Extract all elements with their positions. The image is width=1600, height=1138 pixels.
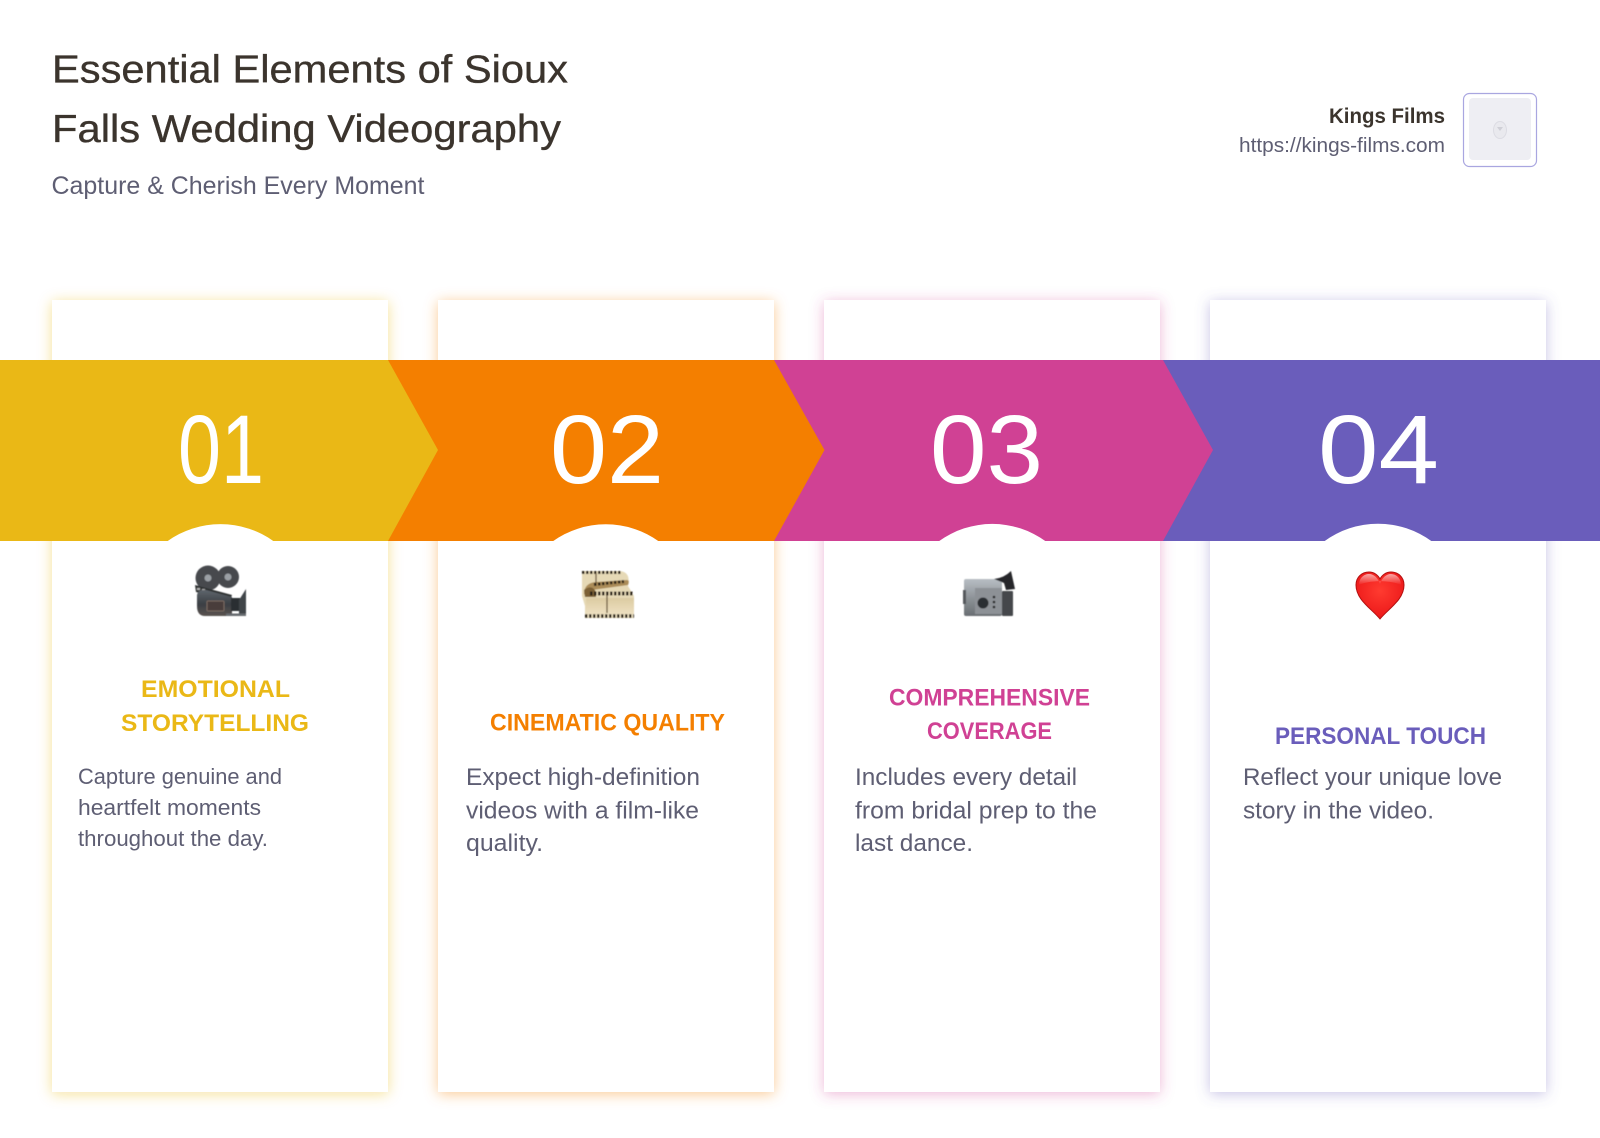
notch: card 4 xyxy=(1324,524,1432,542)
panel: card 2 background xyxy=(438,300,774,1092)
card 1 heading: EMOTIONAL xyxy=(141,676,290,703)
card 3 text: last dance. xyxy=(855,830,973,857)
card 4 text: story in the video. xyxy=(1243,798,1434,824)
brand block xyxy=(1239,94,1536,166)
card 3 heading: COMPREHENSIVE xyxy=(889,684,1090,712)
panel: card 3 background xyxy=(824,300,1160,1092)
title xyxy=(52,48,569,151)
card 3 text: from bridal prep to the xyxy=(855,798,1097,824)
chevron band: step 1 xyxy=(0,360,438,541)
card 1 text: throughout the day. xyxy=(78,826,268,851)
header: title and subtitle xyxy=(52,48,569,200)
chevron band: step 3 xyxy=(774,360,1213,541)
icon: video camera xyxy=(963,571,1015,616)
number 04: 04 xyxy=(1318,395,1439,504)
card 4 text: Reflect your unique love xyxy=(1243,764,1502,791)
card 1 text: heartfelt moments xyxy=(78,795,261,820)
card 1 text xyxy=(78,764,282,851)
number 02: 02 xyxy=(550,395,664,504)
notch: card 3 xyxy=(938,524,1046,542)
card 3 text xyxy=(855,764,1097,857)
brand url: https://kings-films.com xyxy=(1239,134,1445,157)
card 3 heading xyxy=(889,684,1090,745)
brand name: Kings Films xyxy=(1329,104,1445,128)
chevron band: step 4 xyxy=(1163,360,1600,541)
card 2 text xyxy=(466,764,700,857)
card 3 text: Includes every detail xyxy=(855,764,1077,791)
card 1 heading xyxy=(121,676,309,737)
notch: card 2 xyxy=(552,524,659,542)
number 03: 03 xyxy=(930,395,1043,504)
card 3 heading: COVERAGE xyxy=(927,718,1052,745)
chevron band: step 2 xyxy=(388,360,824,541)
notch: card 1 xyxy=(167,524,274,542)
card 2 text: Expect high-definition xyxy=(466,764,700,791)
title: Essential Elements of Sioux xyxy=(52,48,569,92)
panel: card 1 background xyxy=(52,300,388,1092)
card 1 text: Capture genuine and xyxy=(78,764,282,789)
card 2 text: quality. xyxy=(466,830,543,857)
title: Falls Wedding Videography xyxy=(52,108,562,151)
logo placeholder xyxy=(1464,94,1536,166)
number 01: 01 xyxy=(178,395,264,504)
icon: movie camera xyxy=(195,566,246,616)
subtitle: Capture & Cherish Every Moment xyxy=(52,172,425,200)
icon: film strip xyxy=(582,571,634,618)
panel: card 4 background xyxy=(1210,300,1546,1092)
card 4 heading: PERSONAL TOUCH xyxy=(1275,723,1486,750)
icon: red heart xyxy=(1356,572,1404,619)
card 2 text: videos with a film-like xyxy=(466,798,699,824)
card 1 heading: STORYTELLING xyxy=(121,710,309,737)
card 4 text xyxy=(1243,764,1502,824)
card 2 heading: CINEMATIC QUALITY xyxy=(490,710,725,736)
